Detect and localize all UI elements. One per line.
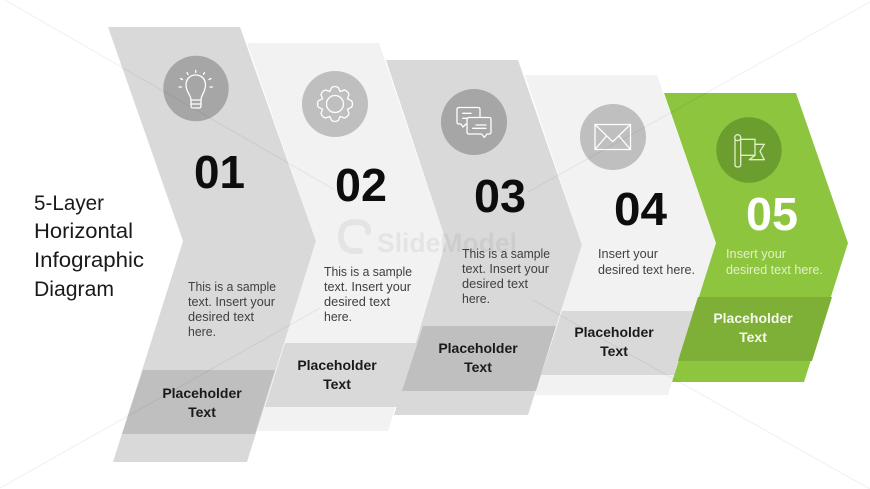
body text 3: here. bbox=[462, 292, 490, 306]
placeholder label 5: Text bbox=[739, 329, 767, 345]
placeholder label 4: Placeholder bbox=[574, 324, 654, 340]
icon: chat bubbles bbox=[457, 108, 491, 137]
placeholder label 3: Text bbox=[464, 359, 492, 375]
icon circle 4 bbox=[580, 104, 646, 170]
body text 3: desired text bbox=[462, 277, 529, 291]
body text 5: Insert your bbox=[726, 247, 786, 261]
icon circle 5 bbox=[716, 117, 782, 183]
panel: layer 5 bbox=[664, 93, 848, 382]
icon: light bulb bbox=[179, 70, 212, 108]
panel: layer 2 bbox=[247, 43, 446, 431]
placeholder label 5: Placeholder bbox=[713, 310, 793, 326]
body text 2: desired text bbox=[324, 295, 391, 309]
body text 1: desired text bbox=[188, 310, 255, 324]
chevron 5 bbox=[664, 93, 848, 382]
title: Diagram bbox=[34, 278, 114, 301]
chevron 1 bbox=[108, 27, 316, 462]
number 03: 03 bbox=[474, 170, 526, 222]
panel: layer 4 bbox=[525, 75, 716, 395]
band 2 bbox=[265, 343, 417, 407]
icon: envelope bbox=[595, 124, 630, 150]
placeholder label 4: Text bbox=[600, 343, 628, 359]
icon circle 1 bbox=[163, 56, 229, 121]
icon: gear bbox=[318, 86, 352, 122]
number 01: 01 bbox=[194, 146, 245, 198]
placeholder label 1: Text bbox=[188, 404, 216, 420]
body text 1: here. bbox=[188, 325, 216, 339]
band 4 bbox=[541, 311, 694, 375]
band 1 bbox=[122, 370, 275, 434]
body text 3: This is a sample bbox=[462, 247, 550, 261]
panel: layer 1 bbox=[108, 27, 316, 462]
body text 3: text. Insert your bbox=[462, 262, 549, 276]
body text 2: This is a sample bbox=[324, 265, 412, 279]
body text 4: desired text here. bbox=[598, 263, 695, 277]
icon circle 3 bbox=[441, 89, 507, 155]
placeholder label 3: Placeholder bbox=[438, 340, 518, 356]
title: Horizontal bbox=[34, 220, 133, 243]
body text 4: Insert your bbox=[598, 247, 658, 261]
body text 2: here. bbox=[324, 310, 352, 324]
icon: flag bbox=[735, 135, 764, 167]
title: 5-Layer bbox=[34, 192, 104, 215]
number 02: 02 bbox=[335, 159, 387, 211]
title: Infographic bbox=[34, 249, 144, 272]
watermark: SlideModel bbox=[377, 228, 517, 258]
placeholder label 2: Placeholder bbox=[297, 357, 377, 373]
band 3 bbox=[402, 326, 556, 391]
chevron 2 bbox=[247, 43, 446, 431]
placeholder label 2: Text bbox=[323, 376, 351, 392]
panel: layer 3 bbox=[386, 60, 582, 415]
number 04: 04 bbox=[614, 183, 667, 235]
placeholder label 1: Placeholder bbox=[162, 385, 242, 401]
band 5 bbox=[678, 297, 832, 361]
number 05: 05 bbox=[746, 188, 798, 240]
chevron 4 bbox=[525, 75, 716, 395]
body text 1: This is a sample bbox=[188, 280, 276, 294]
body text 5: desired text here. bbox=[726, 263, 823, 277]
body text 2: text. Insert your bbox=[324, 280, 411, 294]
body text 1: text. Insert your bbox=[188, 295, 275, 309]
icon circle 2 bbox=[302, 71, 368, 137]
chevron 3 bbox=[386, 60, 582, 415]
